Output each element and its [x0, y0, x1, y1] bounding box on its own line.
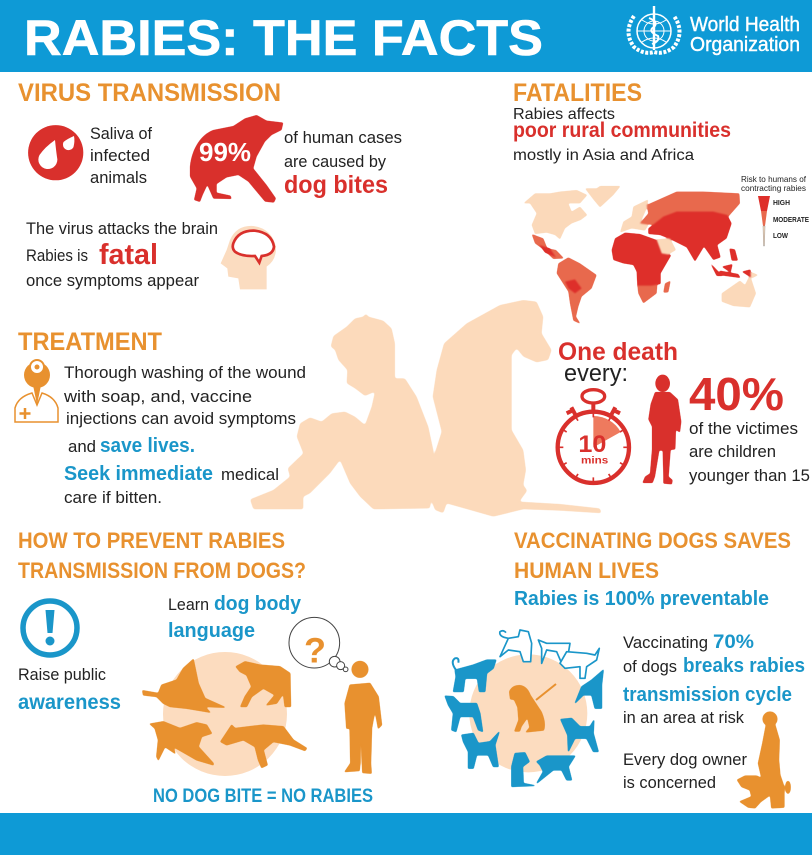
text: dog bites: dog bites	[284, 171, 388, 199]
text: vaccinating 70%: Vaccinating	[623, 633, 708, 652]
thought bubble	[289, 617, 348, 672]
text: fatal: once symptoms appear	[26, 271, 199, 290]
heading: prevention: TRANSMISSION FROM DOGS?	[18, 558, 306, 583]
heading: vaccinating: HUMAN LIVES	[514, 558, 659, 583]
icon: red dog 99%: 99%	[199, 137, 251, 167]
panel: treatment	[15, 328, 306, 507]
text: awareness	[18, 665, 121, 714]
footer band	[0, 813, 812, 855]
text: dog body language: dog body	[214, 593, 302, 615]
icon: doctor	[15, 360, 58, 422]
text: 40% children: are children	[689, 442, 776, 461]
text: dog bites: of human cases	[284, 128, 402, 147]
text: treatment advice: injections can avoid symptoms	[66, 409, 296, 428]
text: 40% children: 40%	[689, 368, 784, 420]
icon: stopwatch: 10	[578, 431, 606, 458]
thought bubble: ?	[304, 631, 326, 670]
text: one death every: One death	[558, 338, 678, 366]
text: saliva: animals	[90, 168, 147, 187]
illustration: ring of dogs	[445, 630, 603, 787]
icon: red dog 99%	[190, 115, 283, 203]
panel: prevention	[18, 528, 382, 807]
text: rural communities: poor rural communities	[513, 119, 731, 142]
text: vaccinating 70%: of dogs	[623, 657, 677, 676]
text: rural communities	[513, 106, 731, 164]
text: dog body language: Learn	[168, 595, 209, 614]
text: treatment advice: save lives.	[100, 435, 195, 457]
panel: vaccinating dogs	[445, 528, 805, 808]
panel: virus transmission	[18, 79, 402, 290]
text: saliva: infected	[90, 146, 150, 165]
icon: stopwatch	[558, 390, 629, 483]
text: one death every	[558, 338, 678, 387]
text: one death every: every:	[564, 360, 628, 387]
text: rural communities: mostly in Asia and Africa	[513, 147, 694, 164]
panel: fatalities	[513, 79, 809, 324]
map legend: Risk to humans of	[741, 174, 807, 184]
WHO logo	[628, 6, 800, 56]
text: fatal	[26, 219, 218, 290]
heading: vaccinating	[514, 528, 791, 583]
text: dog body language	[168, 593, 302, 642]
text: 40% children: of the victimes	[689, 419, 798, 438]
text: vaccinating 70%: breaks rabies	[683, 655, 805, 677]
heading: prevention	[18, 528, 306, 583]
text: fatal: Rabies is	[26, 246, 88, 265]
slogan: NO DOG BITE = NO RABIES	[153, 786, 373, 807]
text: treatment advice: care if bitten.	[64, 488, 162, 507]
world risk map	[523, 186, 758, 324]
text: rural communities: Rabies affects	[513, 106, 615, 123]
text: dog bites: are caused by	[284, 152, 386, 171]
header banner	[0, 0, 812, 72]
panel: death statistics	[558, 338, 810, 485]
map legend: HIGH	[773, 198, 790, 207]
subheading: Rabies is 100% preventable	[514, 588, 769, 610]
text: treatment advice: Seek immediate	[64, 463, 213, 485]
text: awareness: awareness	[18, 691, 121, 714]
text: treatment advice: Thorough washing of the wound	[64, 363, 306, 382]
text: dog body language: language	[168, 620, 255, 642]
heading: fatalities: FATALITIES	[513, 79, 642, 107]
text: saliva	[90, 124, 152, 187]
heading: vaccinating: VACCINATING DOGS SAVES	[514, 528, 791, 553]
text: vaccinating 70%: transmission cycle	[623, 684, 792, 706]
text: dog owner: is concerned	[623, 773, 716, 792]
icon: head with brain	[221, 226, 276, 289]
orange boy	[345, 661, 382, 773]
central silhouette: boy and dog	[250, 300, 602, 517]
text: fatal: fatal	[99, 239, 158, 271]
icon: stopwatch: mins	[581, 456, 609, 467]
text: saliva: Saliva of	[90, 124, 152, 143]
text: fatal: The virus attacks the brain	[26, 219, 218, 238]
text: awareness: Raise public	[18, 665, 106, 684]
heading: virus transmission: VIRUS TRANSMISSION	[18, 79, 281, 107]
heading: prevention: HOW TO PREVENT RABIES	[18, 528, 285, 553]
icon: owner walking dog	[737, 712, 790, 808]
WHO logo: World Health	[690, 14, 800, 36]
icon: exclamation	[23, 601, 77, 655]
map legend: contracting rabies	[741, 183, 806, 193]
title: RABIES: THE FACTS	[24, 10, 543, 66]
text: 40% children: younger than 15	[689, 466, 810, 485]
text: dog bites	[284, 128, 402, 199]
icon: saliva drops	[28, 125, 83, 180]
map legend: LOW	[773, 231, 789, 240]
map legend	[741, 174, 809, 246]
text: treatment advice: with soap, and, vaccine	[63, 387, 252, 406]
text: vaccinating 70%	[623, 632, 805, 727]
WHO logo: Organization	[690, 34, 800, 56]
text: treatment advice: medical	[221, 465, 279, 484]
text: treatment advice	[63, 363, 306, 507]
illustration: dog body language	[143, 617, 382, 776]
text: vaccinating 70%: 70%	[713, 632, 754, 653]
text: dog owner: Every dog owner	[623, 750, 747, 769]
text: vaccinating 70%: in an area at risk	[623, 708, 744, 727]
heading: treatment: TREATMENT	[18, 328, 162, 356]
icon: red child	[642, 375, 681, 484]
text: 40% children	[689, 368, 810, 485]
text: treatment advice: and	[68, 437, 96, 456]
text: dog owner	[623, 750, 747, 792]
